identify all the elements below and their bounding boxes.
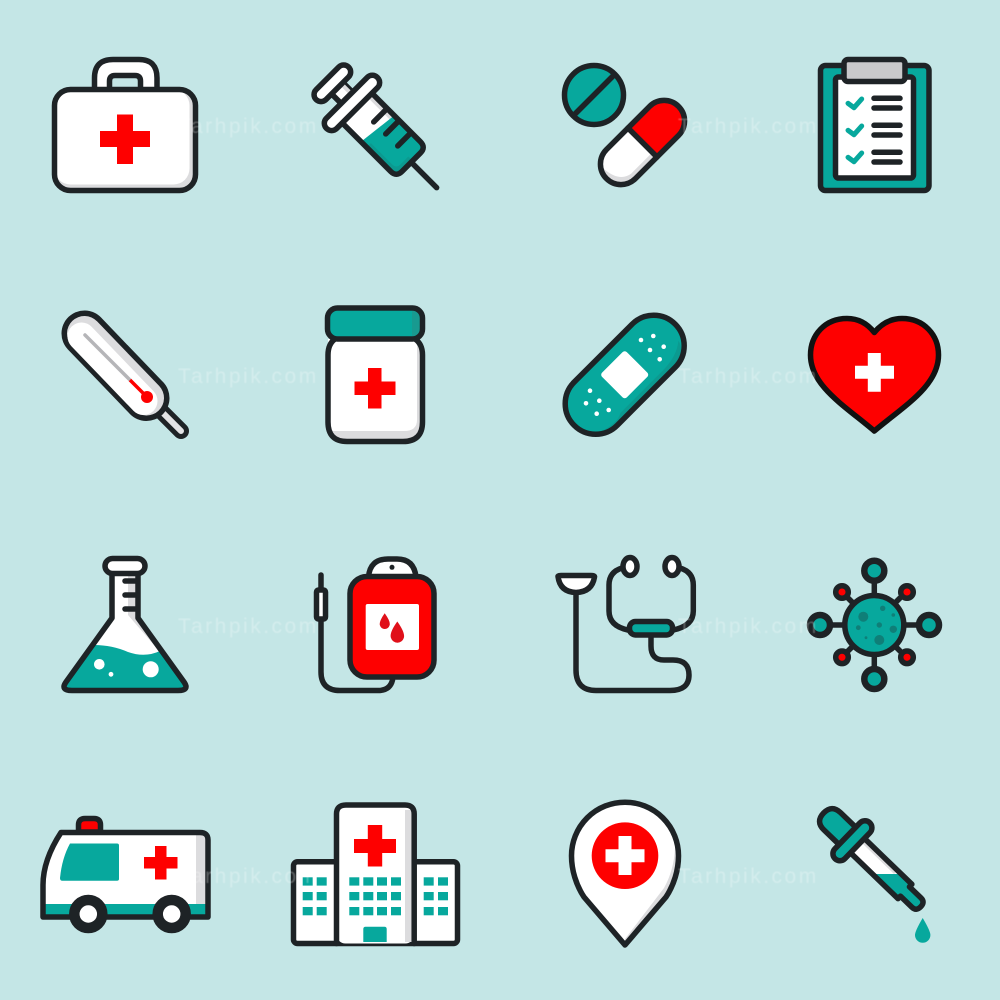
icon: hospital building	[294, 805, 458, 944]
watermarks: Tarhpik.com	[178, 365, 319, 388]
icon: capsule	[592, 92, 693, 193]
icon: bandage	[553, 303, 697, 447]
watermarks	[178, 115, 819, 888]
icon: stethoscope	[558, 558, 693, 690]
icon: first aid kit	[54, 60, 196, 190]
icon: heart with cross	[810, 318, 938, 431]
icon: ambulance	[43, 818, 208, 928]
icon: thermometer	[82, 334, 181, 431]
watermarks: Tarhpik.com	[678, 365, 819, 388]
watermarks: Tarhpik.com	[678, 865, 819, 888]
icon: location pin	[572, 802, 678, 945]
icon: blood bag	[316, 559, 434, 690]
icon: clipboard checklist	[820, 60, 929, 190]
icon: virus	[810, 561, 939, 689]
icon: syringe	[302, 53, 462, 213]
icon: laboratory flask	[64, 558, 186, 690]
icon: dropper	[816, 806, 930, 943]
watermarks: Tarhpik.com	[678, 615, 819, 638]
watermarks: Tarhpik.com	[178, 615, 319, 638]
icon: round tablet	[564, 66, 624, 124]
watermarks: Tarhpik.com	[678, 115, 819, 138]
watermarks: Tarhpik.com	[178, 865, 319, 888]
icon: medicine jar	[328, 308, 422, 442]
watermarks: Tarhpik.com	[178, 115, 319, 138]
